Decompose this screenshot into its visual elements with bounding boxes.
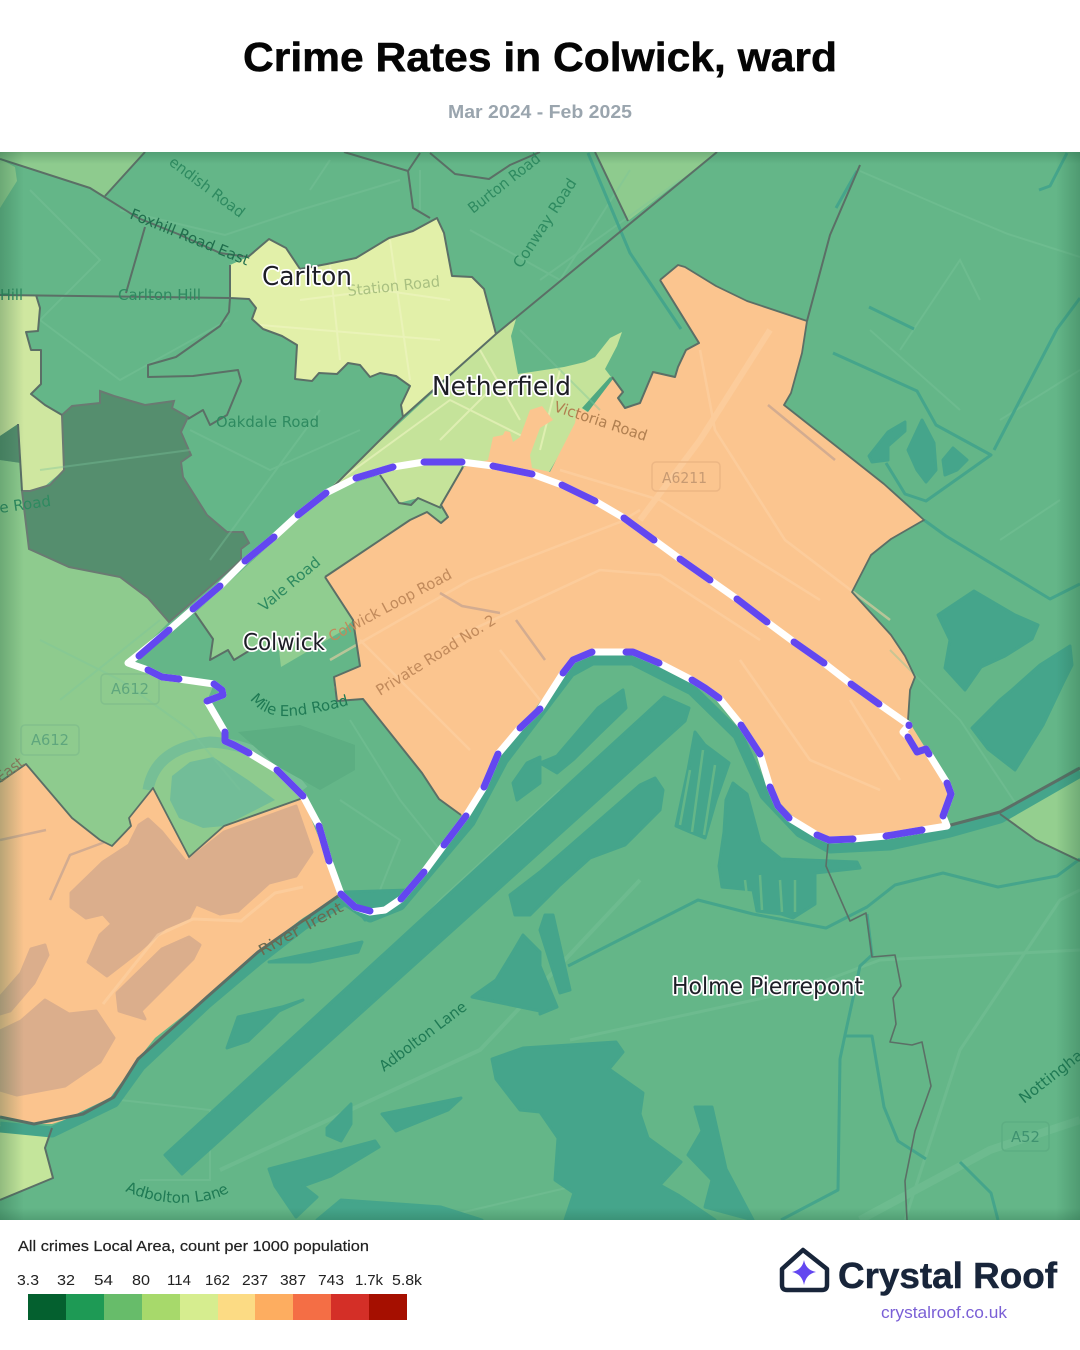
- legend scale labels: 1.7k: [355, 1272, 384, 1289]
- map base: green area: [0, 152, 1080, 1220]
- logo wordmark: Crystal Roof: [838, 1255, 1058, 1296]
- region: pale lime west: [0, 295, 64, 493]
- legend scale labels: 387: [280, 1272, 306, 1289]
- region: green sliver by Victoria Road: [582, 377, 613, 412]
- label: Adbolton Lane north: Adbolton Lane: [376, 998, 470, 1075]
- legend scale labels: 237: [242, 1272, 268, 1289]
- region: pale yellow Carlton: [230, 218, 496, 417]
- roads on orange: [103, 330, 900, 1004]
- lakes inside orange region: [0, 806, 312, 1095]
- region: light green east: [1009, 778, 1080, 859]
- region: light green top centre: [595, 152, 717, 221]
- label: Conway Road: Conway Road: [509, 175, 580, 271]
- lake: pale water west of ward: [170, 757, 275, 828]
- water: second lake: [510, 778, 663, 915]
- label: Station Road: Station Road: [347, 272, 441, 300]
- road sign: A612 upper: [101, 674, 159, 704]
- boundaries between wards: [0, 152, 1080, 1220]
- legend scale labels: 32: [57, 1272, 75, 1289]
- label: Colwick Loop Road: Colwick Loop Road: [325, 565, 455, 646]
- ward boundary: white outline: [128, 462, 951, 912]
- water: river south of Colwick: [345, 890, 410, 920]
- road sign: A6211: [652, 462, 720, 491]
- water: small ponds north east: [869, 420, 967, 482]
- region: dark green: [22, 391, 249, 622]
- label: Oakdale Road: Oakdale Road: [216, 413, 319, 431]
- legend scale labels: 54: [94, 1272, 113, 1289]
- roads on pale regions: [260, 240, 560, 480]
- patch: darker green in Colwick ward: [238, 725, 355, 790]
- road sign: A52: A52: [1011, 1128, 1040, 1146]
- region: orange Colwick and Netherfield: [325, 265, 951, 840]
- legend scale labels: 80: [132, 1272, 150, 1289]
- legend title: All crimes Local Area, count per 1000 population: [18, 1238, 369, 1255]
- place: Carlton: Carlton: [262, 262, 352, 292]
- label: River Trent: River Trent: [255, 898, 346, 959]
- lake: bottom tan: [0, 1000, 114, 1095]
- label: Private Road No. 2: Private Road No. 2: [373, 611, 499, 699]
- water: river band: [0, 660, 1080, 1132]
- road sign: A6211: A6211: [662, 469, 707, 487]
- label: Cavendish Road: endish Road: [166, 153, 248, 221]
- region: lime Netherfield: [334, 319, 622, 508]
- road sign: A612 lower: [21, 725, 79, 755]
- legend scale labels: 114: [167, 1272, 191, 1289]
- label: Foxhill Road East: Foxhill Road East: [128, 205, 252, 269]
- road labels: [0, 152, 1080, 1203]
- icon: house with star: [782, 1250, 827, 1290]
- label: Adbolton Lane south: Adbolton Lane: [125, 1182, 228, 1203]
- title: Crime Rates in Colwick, ward: [243, 34, 837, 80]
- panel: choropleth map: [0, 152, 1080, 1220]
- place: Colwick: Colwick: [243, 630, 326, 656]
- water: streams and channels: [568, 153, 1080, 1220]
- lake: large tan: [71, 806, 312, 976]
- legend scale labels: 3.3: [17, 1272, 39, 1289]
- road sign: A612 upper: A612: [111, 680, 149, 698]
- ward boundary: purple dashes: [139, 462, 951, 911]
- map edge vignette: [0, 152, 1080, 1220]
- subtitle: date range: Mar 2024 - Feb 2025: [448, 102, 632, 122]
- water: east lake one: [938, 591, 1038, 690]
- region: light green north west: [0, 152, 145, 196]
- water: ponds south of the river: [227, 690, 860, 1220]
- logo: Crystal Roof: [782, 1250, 1058, 1322]
- place: Netherfield: Netherfield: [432, 372, 571, 402]
- label: Hill: Hill: [0, 286, 23, 304]
- place labels: [243, 262, 863, 1000]
- website url: crystalroof.co.uk: [881, 1303, 1008, 1322]
- legend scale labels: [17, 1272, 423, 1289]
- region: dark green sliver: [0, 424, 21, 463]
- lake ring: pale water bank: [148, 742, 303, 790]
- legend scale labels: 743: [318, 1272, 344, 1289]
- place: Holme Pierrepont: Holme Pierrepont: [672, 974, 863, 1000]
- legend colour bar: [28, 1294, 407, 1320]
- region: orange south west: [0, 764, 341, 1124]
- road sign: A52: [1002, 1122, 1049, 1151]
- region: light green corner: [0, 159, 17, 208]
- label: Burton Road: Burton Road: [464, 149, 544, 217]
- lake: striped tan: [117, 937, 200, 1019]
- water: long rowing lake: [165, 697, 689, 1174]
- footpaths on orange: [0, 405, 835, 900]
- legend scale labels: 5.8k: [392, 1272, 423, 1289]
- region: light green Vale Road: [195, 475, 448, 667]
- region: light green west: [0, 460, 303, 857]
- pond stripes: [680, 750, 795, 912]
- legend: crime rate scale: [17, 1238, 423, 1320]
- label: Mile End Road: Mile End Road: [250, 693, 348, 716]
- road sign: A612 lower: A612: [31, 731, 69, 749]
- roads on green: [30, 160, 1080, 1220]
- label: Victoria Road: Victoria Road: [552, 398, 650, 445]
- label: Vale Road: Vale Road: [255, 553, 324, 615]
- legend scale labels: 162: [205, 1272, 230, 1289]
- water: east lake two: [972, 646, 1072, 770]
- label: Carlton Hill: Carlton Hill: [118, 286, 201, 304]
- region: pale lime south west: [0, 1125, 53, 1200]
- lake: left tan: [0, 945, 48, 1014]
